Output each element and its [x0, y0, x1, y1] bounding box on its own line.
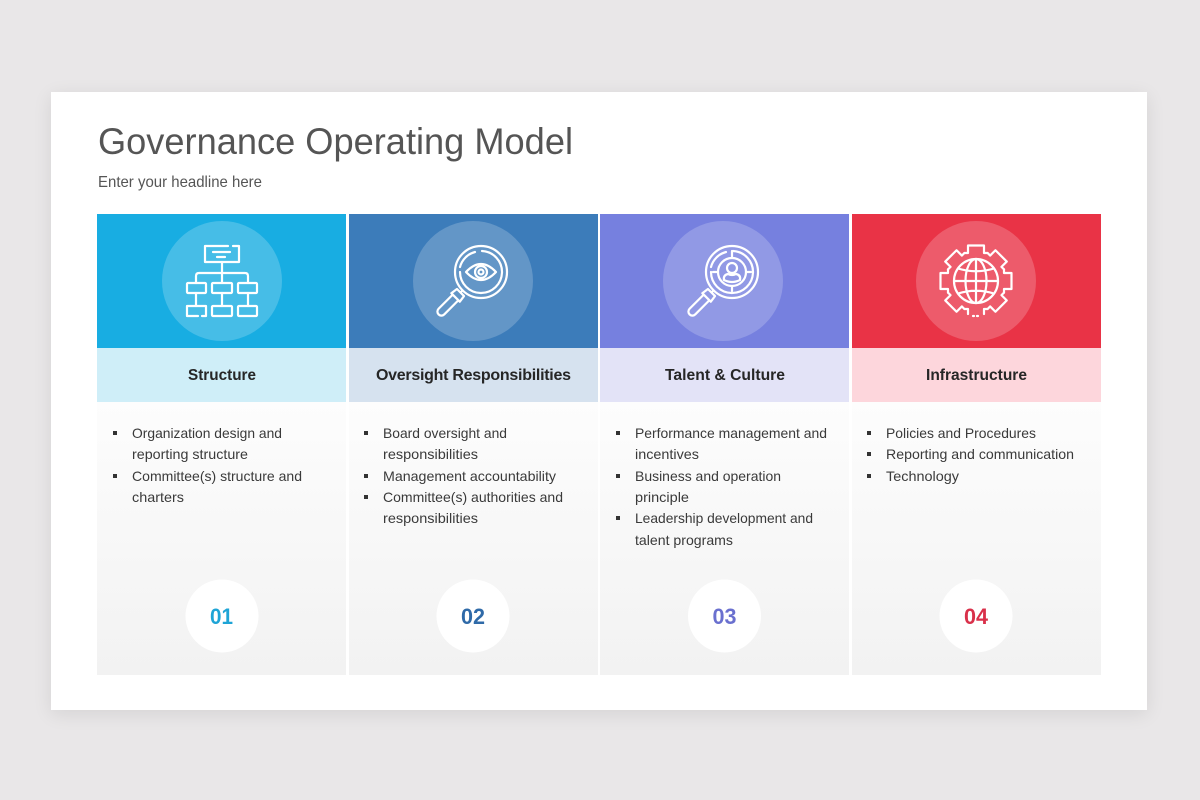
number badge 01	[186, 580, 258, 652]
number badge 04: 04	[964, 604, 989, 629]
heading: structure: Structure	[188, 367, 256, 384]
number badge 02	[436, 580, 510, 652]
list: structure: Committee(s) structure and	[132, 468, 302, 484]
list: oversight responsibilities: responsibilities	[383, 510, 478, 526]
icon: magnifier with person	[685, 246, 758, 319]
list: structure: charters	[132, 489, 184, 505]
list: talent and culture: Performance management and	[635, 425, 827, 441]
number badge 03	[688, 580, 761, 652]
list: talent and culture: Business and operation	[635, 468, 781, 484]
list: talent and culture: talent programs	[635, 532, 733, 548]
number badge 02: 02	[461, 604, 485, 629]
icon: magnifier with eye	[434, 246, 507, 319]
list: talent and culture: Leadership development and	[635, 510, 813, 526]
panel: talent and culture	[600, 214, 849, 675]
slide card background	[51, 92, 1147, 710]
title: Governance Operating Model	[98, 121, 573, 162]
list: oversight responsibilities: Management accountability	[383, 468, 556, 484]
list: oversight responsibilities: Board oversight and	[383, 425, 507, 441]
list: talent and culture	[616, 425, 827, 548]
heading: infrastructure: Infrastructure	[926, 367, 1027, 384]
list: talent and culture: principle	[635, 489, 689, 505]
list: infrastructure: Reporting and communication	[886, 446, 1074, 462]
list: structure	[113, 425, 302, 505]
icon: organization chart	[187, 246, 257, 316]
list: infrastructure: Policies and Procedures	[886, 425, 1036, 441]
heading: oversight responsibilities: Oversight Responsibilities	[376, 367, 571, 384]
number badge 04	[940, 580, 1012, 652]
icon: gear with globe	[940, 246, 1012, 316]
subtitle: Enter your headline here	[98, 174, 262, 191]
list: infrastructure	[867, 425, 1074, 484]
list: structure: reporting structure	[132, 446, 248, 462]
panel: structure	[97, 214, 346, 675]
number badge 03: 03	[712, 604, 736, 629]
list: infrastructure: Technology	[886, 468, 959, 484]
list: oversight responsibilities: Committee(s) authorities and	[383, 489, 563, 505]
list: oversight responsibilities: responsibilities	[383, 446, 478, 462]
panel: infrastructure	[852, 214, 1101, 675]
number badge 01: 01	[210, 604, 233, 629]
heading: talent and culture: Talent & Culture	[665, 367, 785, 384]
list: structure: Organization design and	[132, 425, 282, 441]
panel: oversight responsibilities	[349, 214, 598, 675]
list: talent and culture: incentives	[635, 446, 699, 462]
list: oversight responsibilities	[364, 425, 563, 526]
